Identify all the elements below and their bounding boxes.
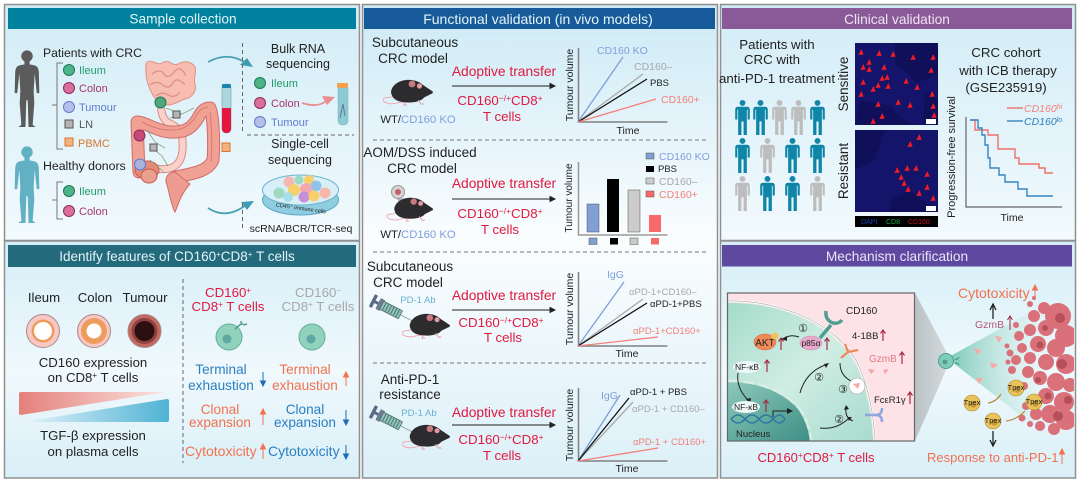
chart: tumour volume bars: Tumour volume bbox=[564, 163, 575, 233]
chart: tumour volume lines: Tumour volume bbox=[564, 49, 576, 121]
text: transferred cells: + bbox=[538, 206, 543, 216]
text: GzmB: GzmB bbox=[869, 354, 897, 365]
icon: blood tube bbox=[222, 84, 231, 133]
icon: T cell bbox=[938, 354, 959, 368]
icon: 4-1BB receptor bbox=[841, 344, 858, 358]
text: transferred cells: CD160 bbox=[458, 315, 500, 330]
circled numbers: ② bbox=[834, 414, 844, 426]
legend: microscopy channels: DAPI bbox=[861, 219, 877, 226]
illustration: petri dish bbox=[262, 175, 338, 216]
chart: resistance tumour volume bbox=[564, 387, 707, 475]
icon: mouse bbox=[402, 425, 450, 449]
heading: CD160 positive cells: CD8 bbox=[192, 299, 218, 314]
feature: clonal expansion CD160+: Clonal bbox=[201, 402, 239, 417]
icon: p85 alpha: p85α bbox=[801, 338, 821, 348]
heading: clinical validation bbox=[722, 8, 1072, 29]
text: cell label: CD160 bbox=[757, 450, 798, 465]
chart: PD-1 tumour volume: Time bbox=[616, 348, 639, 360]
text: patients with CRC: Patients with CRC bbox=[43, 46, 142, 60]
feature: terminal exhaustion CD160+: Terminal bbox=[195, 362, 247, 377]
text: adoptive transfer: Adoptive transfer bbox=[452, 64, 557, 79]
patient sample list: Colon bbox=[79, 83, 108, 95]
heading: identify features: T cells bbox=[252, 249, 295, 264]
arrow: to bulk RNA sequencing bbox=[208, 57, 253, 67]
text: scRNA/BCR/TCR-seq: scRNA/BCR/TCR-seq bbox=[250, 223, 352, 235]
bulk RNA sample list: Ileum bbox=[271, 78, 298, 90]
circled numbers: ③ bbox=[838, 384, 848, 396]
label: resistant: Resistant bbox=[836, 143, 851, 199]
text: transferred cells: CD8 bbox=[512, 315, 539, 330]
chart: survival curve: CD160 bbox=[1024, 103, 1057, 115]
text: CD160 expression: on CD8 bbox=[48, 370, 92, 385]
icon: AKT bbox=[754, 332, 778, 350]
connector cone bbox=[915, 293, 947, 441]
donor sample list: Colon bbox=[79, 206, 108, 218]
heading: functional validation bbox=[364, 8, 715, 29]
model 3: subcutaneous with PD-1 Ab bbox=[367, 259, 702, 360]
chart: resistance tumour volume: αPD-1 + PBS bbox=[630, 387, 687, 398]
circled numbers: ① bbox=[798, 323, 808, 335]
feature: clonal expansion CD160+: expansion bbox=[189, 415, 251, 430]
icon: Tpex cells bbox=[964, 380, 1043, 429]
icon: patient body bbox=[15, 50, 39, 127]
icon: healthy donor body bbox=[15, 146, 39, 223]
heading: mechanism clarification: Mechanism clarification bbox=[826, 249, 968, 264]
heading: bulk RNA sequencing: Bulk RNA bbox=[271, 42, 326, 56]
panel: clinical validation bbox=[719, 4, 1076, 240]
patient sample list: PBMC bbox=[78, 138, 110, 150]
chart: resistance tumour volume: αPD-1 + CD160+ bbox=[633, 437, 707, 448]
text: WT/CD160 KO: WT/CD160 KO bbox=[380, 114, 456, 126]
chart: tumour volume bars: CD160– bbox=[659, 176, 698, 188]
feature: terminal exhaustion CD160-: exhaustion bbox=[272, 378, 338, 393]
text: cell label: + bbox=[829, 450, 834, 460]
icon: NF-kB nucleus: NF-κB bbox=[734, 402, 758, 412]
model 4 title: resistance bbox=[379, 387, 441, 402]
icon: p85 alpha bbox=[800, 336, 822, 350]
text: transferred cells: −/+ bbox=[499, 93, 511, 103]
text: transferred cells: CD160 bbox=[457, 93, 499, 108]
chart: resistance tumour volume: αPD-1 + CD160– bbox=[632, 404, 706, 415]
patient sample list: Ileum bbox=[79, 65, 106, 77]
gradient wedge: CD160 bbox=[19, 392, 166, 415]
text: patients with CRC: Patients with bbox=[739, 37, 815, 52]
arrow bbox=[452, 84, 555, 88]
panel: functional validation bbox=[362, 4, 718, 478]
text: GzmB up: GzmB bbox=[975, 319, 1004, 331]
text: GzmB up bbox=[975, 316, 1012, 331]
heading: clinical validation: Clinical validation bbox=[844, 12, 950, 27]
icon: CD160 receptor bbox=[820, 311, 842, 338]
heading: CD160 negative cells: CD160 bbox=[295, 285, 336, 300]
heading: single-cell sequencing: sequencing bbox=[268, 153, 332, 167]
icon: NF-kB cytoplasm: NF-κB bbox=[735, 362, 759, 372]
heading: mechanism clarification bbox=[722, 245, 1072, 266]
icon: mouse bbox=[402, 314, 450, 338]
text: WT/CD160 KO: WT/CD160 KO bbox=[380, 229, 456, 241]
chart: survival curve: lo bbox=[1057, 117, 1062, 124]
chart: tumour volume lines: CD160+ bbox=[661, 94, 700, 106]
text: GzmB bbox=[868, 354, 897, 374]
illustration: tumour bbox=[1004, 296, 1077, 435]
chart: survival curve: Progression-free survival bbox=[946, 96, 958, 218]
icon: colon cross-section bbox=[78, 314, 110, 348]
label: sensitive: Sensitive bbox=[836, 57, 851, 111]
text: adoptive transfer: Adoptive transfer bbox=[452, 288, 557, 303]
text: transferred cells: CD160 bbox=[457, 206, 499, 221]
text: transferred cells: CD160 bbox=[458, 432, 500, 447]
illustration: petri dish: CD45⁺ immune cells bbox=[275, 202, 327, 216]
chart: survival curve bbox=[946, 96, 1063, 224]
text: FceR1 gamma: FcεR1γ bbox=[874, 395, 906, 406]
chart: survival curve: hi bbox=[1057, 104, 1063, 111]
chart: resistance tumour volume: IgG bbox=[601, 390, 618, 402]
model 3 title: CRC model bbox=[373, 275, 443, 290]
model 2: AOM/DSS bbox=[363, 145, 710, 244]
feature: clonal expansion CD160-: expansion bbox=[274, 415, 336, 430]
text: transferred cells: T cells bbox=[484, 330, 522, 345]
chart: tumour volume bars: PBS bbox=[658, 164, 677, 175]
icon: CD160 positive cell bbox=[216, 321, 247, 350]
chart: survival curve: Time bbox=[1001, 212, 1024, 224]
text: CD160 expression: T cells bbox=[97, 370, 139, 385]
icon: CD160 negative cell bbox=[299, 324, 325, 350]
chart: PD-1 tumour volume: αPD-1+CD160+ bbox=[633, 326, 701, 337]
heading: CD160 positive cells: CD160 bbox=[205, 285, 246, 300]
chart: tumour volume lines bbox=[564, 45, 700, 137]
tissue labels: Colon bbox=[78, 290, 112, 305]
icon: Tpex cells: Tpex bbox=[985, 416, 1002, 425]
text: CRC cohort: (GSE235919) bbox=[965, 80, 1047, 95]
icon: FceR1 gamma receptor bbox=[865, 408, 882, 422]
panel: sample collection bbox=[4, 4, 360, 240]
divider bbox=[182, 279, 184, 463]
bulk RNA sample list: Colon bbox=[271, 98, 300, 110]
up arrows in the cell bbox=[764, 330, 912, 412]
feature: terminal exhaustion CD160+ bbox=[188, 362, 266, 393]
chart: tumour volume bars: CD160+ bbox=[659, 189, 698, 201]
model 4 title: Anti-PD-1 bbox=[381, 372, 439, 387]
icon: AKT: AKT bbox=[755, 338, 775, 349]
text: CRC cohort: CRC cohort bbox=[971, 45, 1041, 60]
text: TGF-beta expression: on plasma cells bbox=[48, 444, 139, 459]
text: transferred cells: T cells bbox=[483, 109, 521, 124]
icon: mouse bbox=[383, 80, 433, 105]
chart: survival curve: CD160 bbox=[1024, 116, 1057, 128]
patient sample list: LN bbox=[79, 119, 93, 131]
granzyme particles bbox=[974, 336, 1002, 384]
text: 4-1BB: 4-1BB bbox=[852, 331, 878, 342]
heading: identify features: + bbox=[216, 250, 221, 259]
heading: CD160 negative cells: CD8 bbox=[282, 299, 308, 314]
chart: tumour volume lines: PBS bbox=[650, 78, 669, 89]
icon: syringe bbox=[369, 405, 416, 438]
arrows: Tpex to tumour bbox=[988, 394, 1025, 421]
cone: cell to tumour bbox=[947, 302, 1048, 437]
bulk RNA sample list bbox=[254, 78, 309, 129]
chart: tumour volume bars: CD160 KO bbox=[659, 151, 710, 163]
heading: CD160 negative cells: − bbox=[336, 286, 341, 295]
icon: syringe bbox=[369, 294, 416, 327]
heading: CD160 positive cells: T cells bbox=[223, 299, 265, 314]
model 1 title: Subcutaneous bbox=[372, 35, 458, 50]
text: transferred cells: + bbox=[538, 93, 543, 103]
circled numbers bbox=[798, 323, 848, 426]
chart: tumour volume lines: CD160 KO bbox=[597, 45, 648, 57]
icon: Tpex cells: Tpex bbox=[1026, 397, 1043, 406]
mechanism detail box bbox=[728, 293, 914, 441]
text: healthy donors: Healthy donors bbox=[43, 159, 126, 173]
panel: identify features bbox=[4, 241, 360, 478]
arrow bbox=[452, 196, 555, 202]
text: cell label: CD8 bbox=[803, 450, 829, 465]
heading: identify features: + bbox=[248, 250, 253, 259]
chart: PD-1 tumour volume: Tumour volume bbox=[564, 273, 576, 345]
heading: CD160 negative cells: T cells bbox=[313, 299, 355, 314]
feature: terminal exhaustion CD160-: Terminal bbox=[279, 362, 331, 377]
chart: tumour volume lines: Time bbox=[617, 125, 640, 137]
text: CD160 expression: CD160 expression bbox=[39, 355, 147, 370]
arrow: pink to sample tube bbox=[302, 96, 335, 105]
donor sample list: Ileum bbox=[79, 186, 106, 198]
feature: clonal expansion CD160+ bbox=[189, 402, 266, 430]
image: resistant microscopy bbox=[855, 130, 938, 212]
heading: single-cell sequencing: Single-cell bbox=[271, 137, 329, 151]
text: transferred cells: T cells bbox=[481, 222, 519, 237]
icon: sample tube bbox=[337, 83, 348, 125]
text: transferred cells: T cells bbox=[483, 448, 521, 463]
feature: cytotoxicity CD160+: Cytotoxicity bbox=[185, 443, 257, 459]
tissue labels: Ileum bbox=[28, 290, 60, 305]
text: response up: Response to anti-PD-1 bbox=[927, 450, 1059, 465]
heading: CD160 negative cells: + bbox=[308, 300, 313, 309]
heading: identify features bbox=[8, 245, 356, 267]
arrow bbox=[452, 308, 555, 312]
icon: PBMC square bbox=[222, 143, 230, 152]
heading: functional validation: Functional validation (in vivo models) bbox=[423, 11, 653, 27]
model 4: anti-PD-1 resistance bbox=[369, 372, 707, 475]
icon: vesicle bbox=[849, 378, 865, 394]
text: nucleus: Nucleus bbox=[736, 429, 771, 440]
chart: PD-1 tumour volume: IgG bbox=[607, 269, 624, 281]
icon: Tpex cells: Tpex bbox=[964, 398, 981, 407]
text: transferred cells: CD8 bbox=[511, 206, 538, 221]
text: patients with CRC: anti-PD-1 treatment bbox=[719, 71, 835, 86]
feature: terminal exhaustion CD160+: exhaustion bbox=[188, 378, 254, 393]
text: patients with CRC: CRC with bbox=[744, 52, 800, 67]
heading: CD160 positive cells: + bbox=[218, 300, 223, 309]
icon: tumour cross-section bbox=[128, 314, 161, 348]
illustration: intestine bbox=[134, 61, 214, 212]
chart: tumour volume lines: CD160– bbox=[634, 61, 673, 73]
panel: mechanism clarification bbox=[720, 241, 1077, 478]
text: adoptive transfer: Adoptive transfer bbox=[452, 405, 557, 420]
heading: identify features: CD8 bbox=[221, 249, 248, 264]
tissue labels: Tumour bbox=[123, 290, 168, 305]
text: transferred cells: CD8 bbox=[512, 432, 539, 447]
model 3 title: Subcutaneous bbox=[367, 259, 453, 274]
heading: identify features: Identify features of CD160 bbox=[59, 249, 216, 264]
text: transferred cells: + bbox=[539, 315, 544, 325]
icon: mouse with tumour bbox=[387, 186, 433, 221]
heading: CD160 positive cells: + bbox=[246, 286, 251, 295]
text: adoptive transfer: Adoptive transfer bbox=[452, 176, 557, 191]
patient sample list: Tumour bbox=[79, 102, 117, 114]
bulk RNA sample list: Tumour bbox=[271, 117, 309, 129]
icon: Tpex cells: Tpex bbox=[1008, 383, 1025, 392]
icon group: patient responses bbox=[735, 100, 825, 211]
text: PD-1 Ab: PD-1 Ab bbox=[401, 408, 437, 419]
circled numbers: ② bbox=[814, 372, 824, 384]
arrow: to single-cell sequencing bbox=[208, 201, 254, 213]
arrow: Tpex to response bbox=[990, 431, 996, 446]
feature: clonal expansion CD160- bbox=[274, 402, 348, 430]
arrow: GzmB to cytotoxicity bbox=[990, 304, 996, 319]
model 2 title: AOM/DSS induced bbox=[363, 145, 477, 160]
text: PD-1 Ab: PD-1 Ab bbox=[400, 295, 436, 306]
legend: microscopy channels: CD160 bbox=[908, 219, 930, 226]
text: transferred cells: CD8 bbox=[511, 93, 538, 108]
icon: DNA bbox=[731, 415, 785, 423]
chart: PD-1 tumour volume: αPD-1+CD160– bbox=[629, 287, 697, 298]
chart: resistance tumour volume: Tumour volume bbox=[564, 389, 576, 461]
feature: terminal exhaustion CD160- bbox=[272, 362, 348, 393]
text: transferred cells: −/+ bbox=[499, 206, 511, 216]
text: cytotoxicity up: Cytotoxicity bbox=[958, 285, 1030, 301]
text: CD160: CD160 bbox=[846, 306, 878, 317]
image: sensitive microscopy bbox=[855, 43, 938, 125]
divider lines bbox=[242, 43, 354, 231]
heading: sample collection: Sample collection bbox=[129, 12, 237, 26]
text: cell label: + bbox=[798, 450, 803, 460]
text: transferred cells: + bbox=[539, 432, 544, 442]
legend: microscopy channels bbox=[855, 216, 938, 227]
model 2 title: CRC model bbox=[387, 161, 457, 176]
heading: sample collection bbox=[8, 8, 356, 29]
chart: PD-1 tumour volume: αPD-1+PBS bbox=[650, 299, 702, 310]
legend: microscopy channels: CD8 bbox=[886, 219, 900, 226]
heading: bulk RNA sequencing: sequencing bbox=[266, 57, 330, 71]
text: TGF-beta expression: TGF-β expression bbox=[40, 428, 146, 443]
chart: PD-1 tumour volume bbox=[564, 269, 702, 360]
text: transferred cells: −/+ bbox=[500, 432, 512, 442]
feature: clonal expansion CD160-: Clonal bbox=[286, 402, 324, 417]
text: transferred cells: −/+ bbox=[500, 315, 512, 325]
donor sample list bbox=[52, 182, 108, 219]
text: cell label: T cells bbox=[834, 450, 875, 465]
model 1: subcutaneous CRC bbox=[372, 35, 700, 137]
chart: tumour volume bars bbox=[564, 151, 710, 244]
icon: ileum cross-section bbox=[26, 314, 60, 348]
patient sample list bbox=[52, 63, 117, 150]
signalling arrows bbox=[738, 336, 856, 428]
feature: cytotoxicity CD160-: Cytotoxicity bbox=[268, 443, 340, 459]
text: CD160 expression: + bbox=[92, 371, 97, 380]
gradient wedge: TGF-beta bbox=[23, 399, 169, 422]
text: CRC cohort: with ICB therapy bbox=[958, 63, 1057, 78]
chart: resistance tumour volume: Time bbox=[616, 463, 639, 475]
model 1 title: CRC model bbox=[378, 51, 448, 66]
arrow bbox=[452, 422, 555, 428]
